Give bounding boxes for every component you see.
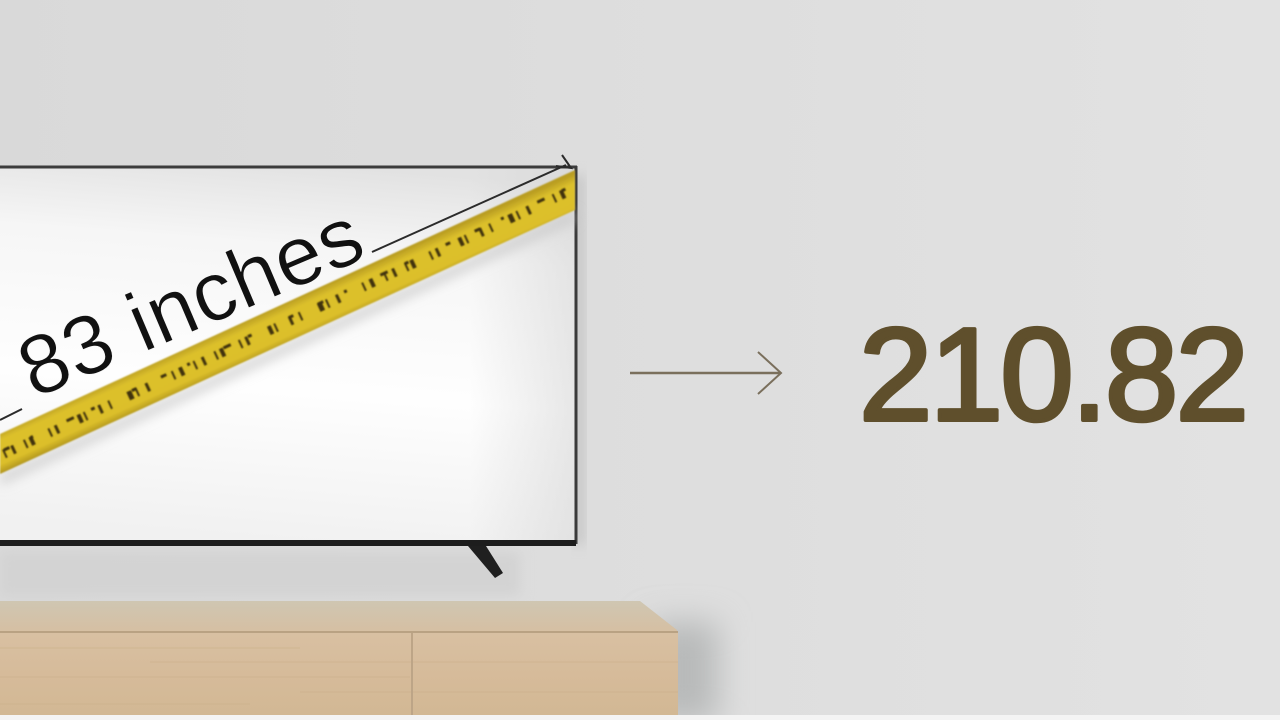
measuring tape [0, 170, 575, 484]
wall shadows [0, 175, 718, 720]
tape body [0, 170, 575, 474]
arrow [630, 352, 781, 394]
cabinet front [0, 633, 678, 715]
cabinet wood grain [0, 648, 678, 704]
cabinet door divider [411, 633, 413, 715]
value: 210.82: 210.82 [859, 301, 1249, 448]
tv screen right shading [470, 168, 575, 541]
cabinet top edge line [0, 631, 678, 633]
tv right edge [574, 166, 578, 544]
tv bottom bezel [0, 540, 576, 546]
cabinet [0, 601, 678, 715]
tv stand leg [468, 546, 503, 578]
line lower segment [0, 409, 22, 420]
television [0, 166, 578, 578]
tv top edge [0, 166, 577, 168]
label: 83 inches: 83 inches [4, 187, 376, 416]
tape shadow [0, 212, 575, 484]
tape markings [4, 187, 570, 454]
line upper segment [372, 165, 566, 252]
diagonal measurement line [0, 155, 571, 420]
line arrowhead [556, 155, 571, 168]
tv screen [0, 168, 575, 541]
cabinet top [0, 601, 677, 633]
floor strip [0, 715, 1280, 720]
